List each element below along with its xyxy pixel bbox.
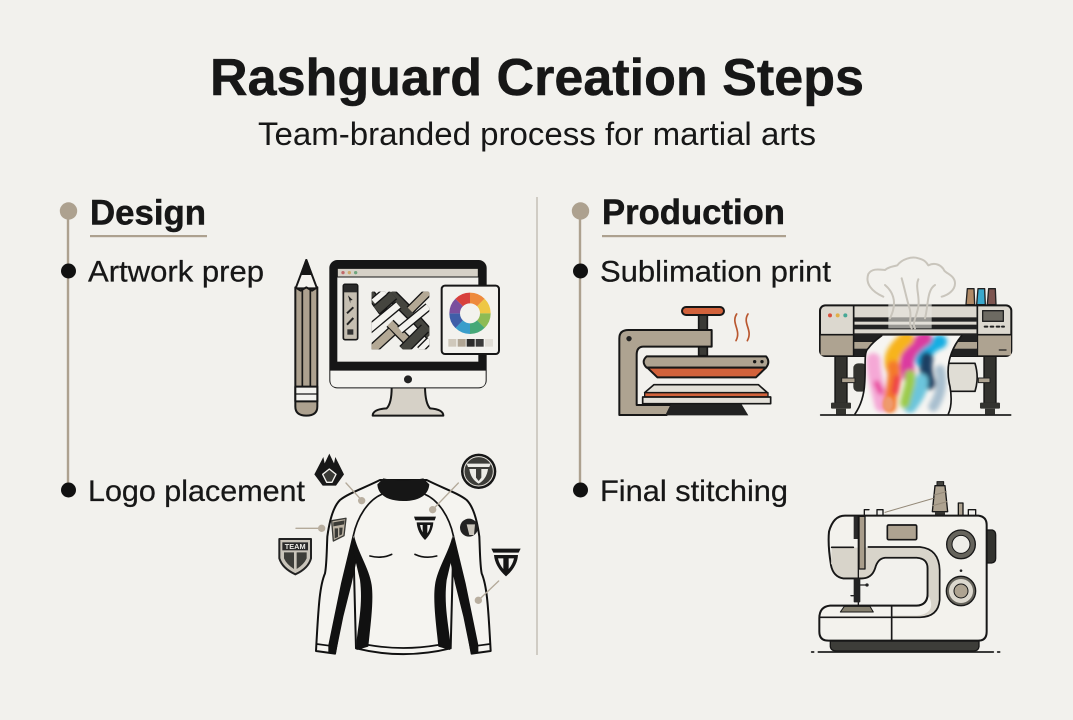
printed sheet with colours (855, 336, 962, 414)
machine body (819, 516, 987, 641)
floor line (821, 412, 1011, 417)
printer display (983, 311, 1003, 321)
step dot: logo placement (61, 482, 76, 498)
logo: team shield (279, 539, 311, 574)
palette swatches (448, 339, 456, 347)
heading underline: production (602, 235, 786, 237)
timeline line: design (67, 211, 69, 490)
media roll (853, 363, 867, 392)
heat press handle (682, 307, 724, 315)
shirt silhouette (316, 480, 491, 654)
subtitle: Team-branded process for martial arts (258, 116, 816, 152)
monitor chin (330, 371, 486, 387)
floor line (812, 649, 1000, 654)
icon: computer monitor with design software (329, 260, 499, 416)
ink cartridges (966, 289, 975, 305)
left sleeve stripe (328, 535, 357, 653)
arm outline (820, 547, 940, 641)
upper platen (644, 356, 768, 368)
icon: rashguard shirt with logos (279, 454, 521, 654)
side hand wheel (987, 530, 996, 563)
step dot: sublimation print (573, 264, 588, 278)
top pegs (877, 510, 883, 516)
arm shading (831, 548, 940, 617)
steam wisps (885, 278, 935, 328)
panel: production timeline (572, 193, 832, 508)
needle column (859, 516, 865, 569)
top dial (947, 530, 975, 559)
step label: sublimation print: Sublimation print (600, 256, 832, 288)
spool (937, 482, 944, 486)
presser foot (851, 579, 867, 602)
thread (885, 492, 947, 512)
color palette card (442, 286, 499, 354)
step label: final stitching: Final stitching (600, 475, 788, 508)
icon: pencil (295, 260, 317, 416)
step dot: final stitching (573, 482, 588, 498)
heat waves (735, 314, 749, 341)
step label: logo placement: Logo placement (88, 475, 306, 508)
timeline line: production (579, 211, 581, 490)
printer body (820, 305, 1011, 356)
right side panel (434, 535, 453, 650)
center divider (536, 197, 538, 655)
icon: heat press (619, 307, 771, 415)
heading: design: Design (90, 194, 206, 232)
left sleeve badge detail (333, 520, 345, 538)
leader lines and dots (296, 483, 499, 600)
left sleeve badge (332, 518, 346, 541)
right sleeve stripe (450, 535, 478, 653)
heat press frame (619, 330, 712, 415)
timeline start dot: production (572, 202, 589, 220)
sheet outline (855, 336, 962, 414)
toolbar (343, 284, 358, 340)
status lights (828, 313, 832, 317)
chest logo cutouts (420, 525, 430, 533)
steam haze (888, 303, 932, 328)
logo: round badge (461, 454, 496, 489)
panel: design timeline (60, 194, 306, 508)
printer legs (835, 355, 847, 403)
monitor screen (337, 268, 478, 362)
bottom dial (946, 576, 976, 606)
print carriage bands (854, 317, 977, 322)
collar (377, 478, 429, 501)
machine base foot (830, 641, 979, 651)
lower platen (645, 385, 767, 393)
logo: crown emblem (314, 454, 344, 486)
chest logo (414, 517, 436, 540)
timeline start dot: design (60, 202, 77, 220)
needle plate (840, 606, 873, 612)
arm inner outline (830, 558, 928, 606)
heading underline: design (90, 235, 207, 237)
monitor stand (373, 387, 443, 416)
heading: production: Production (602, 193, 785, 232)
display panel (887, 525, 917, 540)
steam cloud (867, 258, 955, 297)
title: Rashguard Creation Steps (210, 49, 864, 107)
left side panel (353, 535, 372, 650)
icon: sewing machine (812, 482, 1000, 652)
right sleeve badge (460, 519, 478, 537)
raglan seams and chest lines (317, 494, 490, 648)
color wheel (455, 298, 485, 329)
icon: large format sublimation printer (820, 258, 1011, 415)
heat press base (665, 404, 748, 415)
icon: rashguard shirt with logos: TEAM (285, 542, 306, 551)
monitor body (329, 260, 487, 388)
herringbone pattern (368, 292, 430, 350)
logo: shield mark (491, 549, 521, 576)
logo: crown emblem center (323, 469, 336, 482)
step dot: artwork prep (61, 264, 76, 278)
step label: artwork prep: Artwork prep (88, 256, 264, 288)
